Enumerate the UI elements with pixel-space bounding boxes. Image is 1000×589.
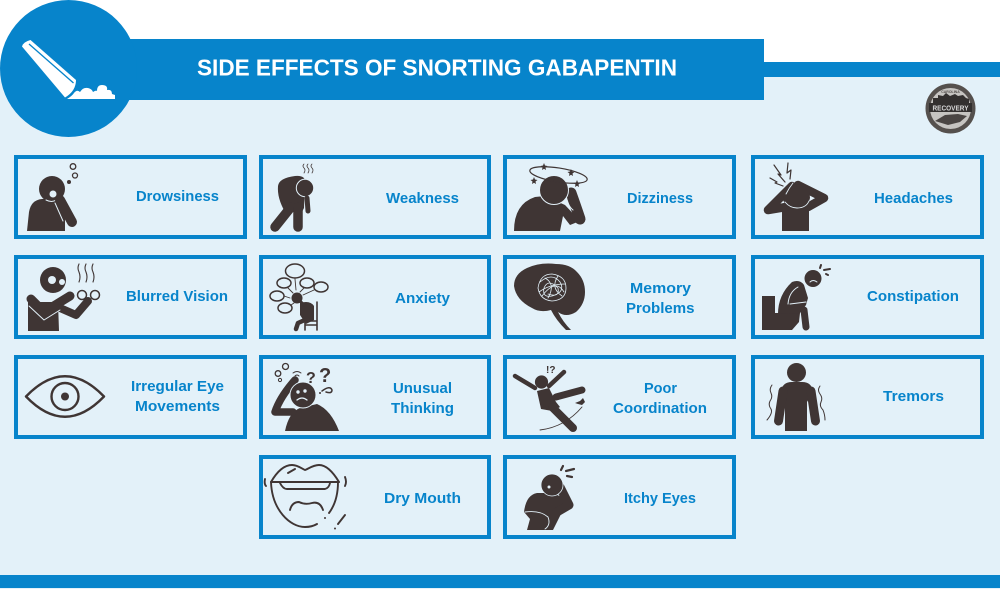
icon: confused person: ? <box>319 365 331 387</box>
logo: RECOVERY <box>932 105 969 112</box>
panel: poor coordination <box>505 357 734 437</box>
icon: person falling <box>515 365 585 430</box>
panel: dizziness <box>505 157 734 237</box>
label: Memory <box>630 280 692 297</box>
icon: confused person: ? <box>306 370 316 387</box>
icon: eye <box>26 376 104 417</box>
label <box>613 380 707 417</box>
panel: blurred vision <box>16 257 245 337</box>
label: Problems <box>626 300 694 317</box>
icon: drowsy person <box>27 164 78 231</box>
label: Weakness <box>386 190 459 207</box>
icon: person on toilet <box>762 265 830 330</box>
label: Headaches <box>874 190 953 207</box>
icon: weak person <box>275 164 314 227</box>
panel: dry mouth <box>261 457 489 537</box>
icon: anxious person with thought bubbles <box>270 264 328 330</box>
logo: CAROLINA <box>941 90 960 94</box>
label: Irregular Eye <box>131 378 224 395</box>
icon: dizzy person <box>514 163 588 231</box>
label: Drowsiness <box>136 188 219 205</box>
label: Tremors <box>883 388 944 405</box>
label: Dizziness <box>627 190 693 207</box>
title: SIDE EFFECTS OF SNORTING GABAPENTIN <box>197 54 677 80</box>
label: Blurred Vision <box>126 288 228 305</box>
panel: irregular eye movements <box>16 357 245 437</box>
label: Anxiety <box>395 290 451 307</box>
icon: tangled brain <box>514 264 585 330</box>
icon: straw and powder <box>22 40 115 99</box>
panel: weakness <box>261 157 489 237</box>
label <box>391 380 454 417</box>
icon: trembling person <box>767 363 825 431</box>
icon: confused person <box>275 364 339 431</box>
icon: person with binoculars <box>28 264 100 331</box>
label: Coordination <box>613 400 707 417</box>
icon: headache person <box>768 163 824 231</box>
panel: constipation <box>753 257 982 337</box>
panel: drowsiness <box>16 157 245 237</box>
panel: anxiety <box>261 257 489 337</box>
title banner <box>125 39 764 100</box>
label: Itchy Eyes <box>624 490 696 507</box>
label: Unusual <box>393 380 452 397</box>
header circle <box>0 0 137 137</box>
header strip <box>764 62 1000 77</box>
label <box>626 280 694 317</box>
label: Poor <box>644 380 677 397</box>
footer bar <box>0 575 1000 588</box>
panel: memory problems <box>505 257 734 337</box>
icon: open mouth <box>265 465 346 530</box>
panel: headaches <box>753 157 982 237</box>
label: Constipation <box>867 288 959 305</box>
logo <box>926 84 976 134</box>
icon: person falling: !? <box>546 365 555 376</box>
label: Thinking <box>391 400 454 417</box>
icon: person rubbing eye <box>524 466 574 530</box>
panel: itchy eyes <box>505 457 734 537</box>
label: Movements <box>135 398 220 415</box>
label <box>131 378 224 415</box>
panel: tremors <box>753 357 982 437</box>
label: Dry Mouth <box>384 490 461 507</box>
panel: unusual thinking <box>261 357 489 437</box>
